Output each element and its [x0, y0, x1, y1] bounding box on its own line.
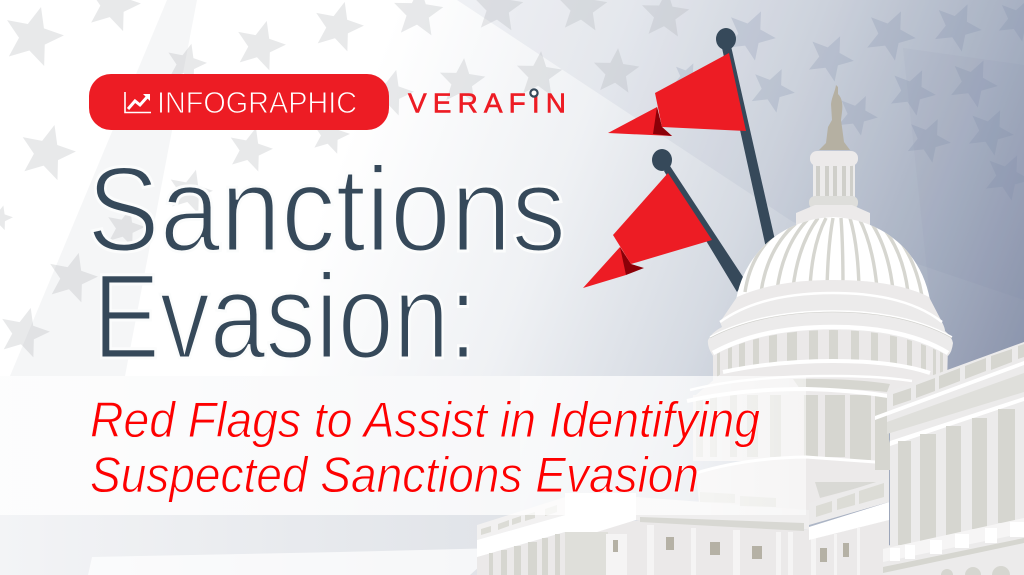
subtitle — [90, 392, 760, 503]
background stars: blue right field — [669, 0, 1024, 204]
right wing of building — [875, 342, 1024, 575]
title — [87, 141, 566, 384]
background stars: light left field — [0, 0, 691, 360]
middle drum tier — [687, 361, 930, 513]
flag pole with red flag, lower — [583, 149, 745, 292]
dome base rings — [708, 280, 953, 356]
flag pole with red flag, upper — [608, 28, 775, 248]
subtitle: Red Flags to Assist in Identifying — [90, 392, 760, 448]
title: Evasion: — [93, 248, 477, 384]
badge: infographic pill — [89, 74, 389, 130]
dome with ribs — [736, 217, 930, 300]
logo: Verafin: VERAFIN — [408, 88, 566, 118]
title: Sanctions — [87, 141, 566, 277]
translucent subtitle band — [0, 376, 806, 515]
capitol building — [477, 85, 1024, 575]
statue on dome — [819, 85, 850, 150]
badge label: INFOGRAPHIC — [157, 85, 357, 120]
subtitle: Suspected Sanctions Evasion — [90, 447, 699, 503]
central lower block with windows — [477, 478, 889, 575]
icon: line chart — [125, 92, 151, 112]
upper drum colonnade — [713, 325, 948, 385]
lantern colonnade — [796, 151, 870, 226]
